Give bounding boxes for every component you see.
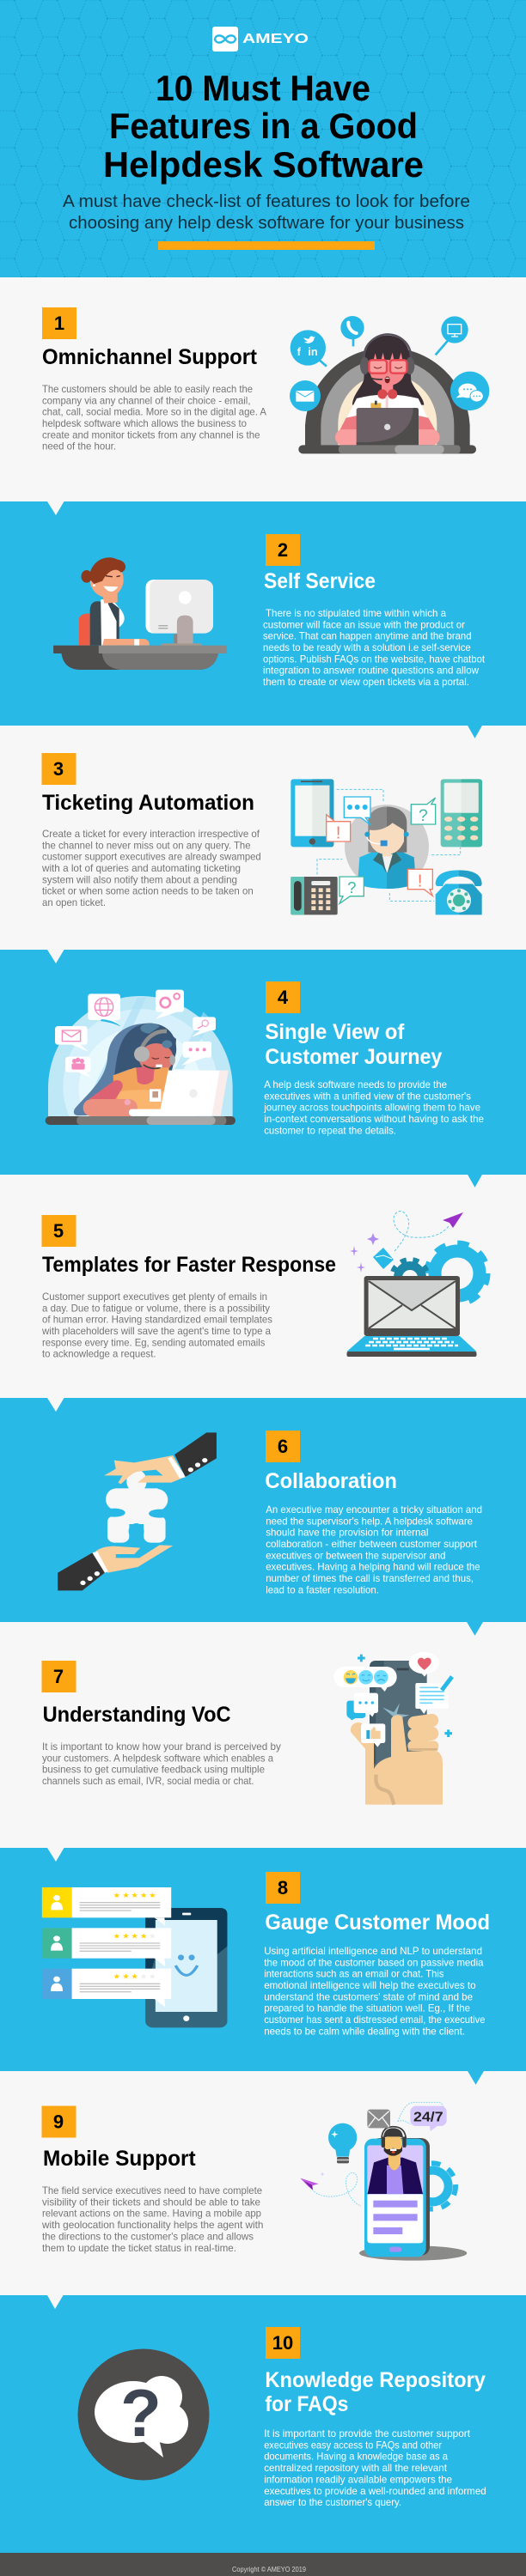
- body text: customer to repeat the details.: [264, 1124, 396, 1136]
- illustration: reviews on tablet: ★: [149, 1893, 156, 1900]
- heading: Knowledge Repository: [265, 2368, 486, 2392]
- subtitle: [63, 191, 470, 233]
- body text: centralized repository with all the relevant: [264, 2462, 448, 2474]
- number badge 5: [41, 1215, 76, 1247]
- logo: AMEYO: AMEYO: [242, 32, 309, 46]
- body text: chat, call, social media. More so in the digital age. A: [42, 406, 266, 418]
- arrow notch: [467, 1622, 483, 1636]
- illustration: hand holding phone: [333, 1652, 452, 1805]
- illustration: support agent with phones: [291, 779, 482, 914]
- arrow notch: [468, 2071, 484, 2085]
- illustration: support agent with phones: ?: [347, 878, 357, 896]
- number badge 9: [41, 2105, 76, 2138]
- body text: system will also notify them about a pending: [42, 873, 237, 885]
- number badge 2: [266, 534, 300, 566]
- illustration: reviews on tablet: ★: [122, 1973, 130, 1981]
- illustration: reviews on tablet: ★: [113, 1893, 120, 1900]
- body text: It is important to provide the customer support: [264, 2427, 471, 2439]
- notch: [47, 2295, 64, 2309]
- panel: 5 templates for faster response: [0, 1175, 526, 1398]
- number badge 7: [41, 1661, 76, 1692]
- body text: with a lot of queries and automating ticketing: [41, 862, 241, 874]
- illustration: agent on phone: [300, 2102, 467, 2261]
- illustration: support agent with phones: ?: [419, 807, 428, 825]
- heading: [265, 2368, 486, 2416]
- heading: Mobile Support: [43, 2147, 196, 2171]
- number badge 3: [41, 753, 76, 785]
- body text: A help desk software needs to provide the: [264, 1078, 447, 1091]
- illustration: woman at computer: [53, 557, 227, 670]
- number badge 9: 9: [53, 2111, 64, 2133]
- body text: executives with a unified view of the customer's: [264, 1090, 471, 1102]
- heading: Single View of: [265, 1020, 405, 1044]
- illustration: reviews on tablet: ★: [140, 1973, 148, 1981]
- illustration: reviews on tablet: ★: [122, 1933, 130, 1941]
- body text: them to create or view open tickets via a portal.: [263, 676, 469, 688]
- body text: Using artificial intelligence and NLP to understand: [264, 1945, 482, 1957]
- body text: Customer support executives get plenty of emails in: [42, 1291, 267, 1303]
- body text: service. That can happen anytime and the brand: [263, 630, 471, 642]
- body text: It is important to know how your brand is perceived by: [42, 1741, 281, 1753]
- illustration: reviews on tablet: ★: [140, 1933, 148, 1941]
- notch: [47, 1848, 64, 1862]
- body text: [264, 2427, 486, 2508]
- number badge 1: 1: [54, 313, 64, 334]
- heading: for FAQs: [265, 2392, 348, 2416]
- notch: [47, 501, 64, 515]
- body text: [264, 1945, 486, 2037]
- body text: There is no stipulated time within which a: [266, 607, 446, 619]
- heading: Collaboration: [265, 1469, 397, 1493]
- illustration: reviews on tablet: ★: [113, 1933, 120, 1941]
- body text: executives easy access to FAQs and other: [264, 2439, 442, 2451]
- panel: 4 single view of customer journey: [0, 950, 526, 1188]
- body text: the mood of the customer based on passive media: [264, 1956, 484, 1968]
- body text: understand the customers' state of mind and be: [264, 1990, 473, 2002]
- illustration: reviews on tablet: ★: [131, 1973, 138, 1981]
- panel: 6 collaboration: [0, 1398, 526, 1636]
- body text: executives. Having a helping hand will reduce the: [266, 1561, 480, 1573]
- number badge 6: 6: [278, 1436, 288, 1457]
- illustration: reviews on tablet: ★: [113, 1973, 120, 1981]
- body text: journey across touchpoints allowing them to have: [263, 1102, 480, 1114]
- illustration: agent with channels: in: [308, 346, 318, 358]
- arrow notch: [468, 726, 482, 738]
- body text: [263, 1078, 484, 1136]
- number badge 8: 8: [278, 1877, 288, 1899]
- body text: an open ticket.: [42, 896, 106, 908]
- panel: 1 omnichannel support: [0, 277, 526, 501]
- illustration: agent with channels: [290, 316, 489, 453]
- body text: ticket or when some action needs to be taken on: [42, 885, 254, 897]
- illustration: reviews on tablet: ★: [140, 1893, 148, 1900]
- illustration: hands with puzzle piece: [58, 1432, 217, 1590]
- body text: [41, 828, 261, 908]
- body text: a day. Due to fatigue or volume, there is a possibility: [42, 1302, 270, 1314]
- title: Helpdesk Software: [103, 144, 424, 185]
- panel: 7 understanding voc: [0, 1622, 526, 1848]
- number badge 3: 3: [53, 758, 64, 780]
- body text: with geolocation functionality helps the agent with: [41, 2219, 263, 2231]
- body text: An executive may encounter a tricky situation and: [266, 1504, 482, 1516]
- body text: need of the hour.: [42, 440, 116, 453]
- number badge 8: [266, 1872, 300, 1904]
- heading: Templates for Faster Response: [42, 1253, 336, 1277]
- footer: [0, 2553, 526, 2576]
- title: Features in a Good: [109, 106, 418, 146]
- number badge 1: [42, 307, 76, 339]
- illustration: agent with laptop: [45, 989, 235, 1125]
- logo: AMEYO: [212, 27, 309, 52]
- panel: 3 ticketing automation: [0, 726, 526, 950]
- body text: collaboration - either between customer support: [266, 1538, 478, 1550]
- number badge 6: [266, 1431, 300, 1462]
- body text: [41, 2184, 263, 2254]
- body text: needs to be calm while dealing with the client.: [264, 2025, 465, 2037]
- illustration: reviews on tablet: ★: [122, 1893, 130, 1900]
- number badge 7: 7: [53, 1666, 64, 1687]
- body text: The field service executives need to have complete: [42, 2184, 262, 2196]
- body text: Create a ticket for every interaction irrespective of: [42, 828, 260, 840]
- body text: [266, 1504, 482, 1595]
- title: [103, 68, 424, 185]
- body text: number of times the call is transferred and thus,: [266, 1572, 474, 1584]
- heading: [265, 1020, 442, 1069]
- body text: answer to the customer's query.: [264, 2496, 401, 2508]
- footer: Copyright © AMEYO 2019: [232, 2565, 306, 2573]
- panel: 2 self service: [0, 501, 526, 738]
- panel: 9 mobile support: [0, 2071, 526, 2295]
- body text: [42, 383, 266, 453]
- body text: need the supervisor's help. A helpdesk software: [266, 1515, 473, 1527]
- panel: header: [0, 0, 526, 277]
- body text: create and monitor tickets from any channel is the: [42, 428, 260, 440]
- title: 10 Must Have: [156, 68, 370, 108]
- panel: 8 gauge customer mood: [0, 1848, 526, 2085]
- body text: options. Publish FAQs on the website, have chatbot: [263, 653, 486, 665]
- icon: question speech bubble: ?: [120, 2375, 162, 2451]
- body text: the directions to the customer's place and allows: [42, 2230, 254, 2242]
- body text: integration to answer routine questions and allow: [263, 665, 479, 677]
- body text: of human error. Having standardized email templates: [42, 1314, 272, 1326]
- body text: in-context conversations without having to ask the: [264, 1113, 484, 1125]
- illustration: reviews on tablet: ★: [149, 1933, 156, 1941]
- body text: channels such as email, IVR, social media or chat.: [42, 1775, 254, 1787]
- panel: 10 knowledge repository: [0, 2295, 526, 2553]
- heading: Ticketing Automation: [42, 791, 254, 815]
- illustration: reviews on tablet: ★: [149, 1973, 156, 1981]
- body text: company via any channel of their choice - email,: [42, 394, 251, 406]
- illustration: agent on phone: 24/7: [413, 2111, 443, 2125]
- arrow notch: [468, 1175, 482, 1188]
- body text: customer has sent a distressed email, the executive: [264, 2014, 486, 2026]
- body text: helpdesk software which allows the business to: [42, 417, 247, 429]
- body text: emotional intelligence will help the executives to: [264, 1979, 476, 1991]
- icon: question speech bubble: [77, 2349, 210, 2480]
- body text: interactions such as an email or chat. This: [264, 1968, 443, 1980]
- illustration: email on laptop with gears: [347, 1212, 486, 1357]
- body text: the channel to never miss out on any query. The: [42, 839, 251, 851]
- body text: documents. Having a knowledge base as a: [264, 2451, 448, 2463]
- heading: Self Service: [264, 569, 376, 593]
- body text: [42, 1741, 281, 1787]
- subtitle: choosing any help desk software for your business: [69, 213, 464, 233]
- illustration: reviews on tablet: [42, 1887, 227, 2027]
- body text: lead to a faster resolution.: [266, 1583, 379, 1595]
- number badge 2: 2: [278, 539, 288, 561]
- body text: information readily available empowers the: [264, 2473, 452, 2485]
- heading: Omnichannel Support: [42, 345, 258, 369]
- illustration: support agent with phones: !: [418, 871, 423, 890]
- body text: with placeholders will save the agent's time to type a: [41, 1325, 271, 1337]
- notch: [47, 950, 64, 963]
- body text: executives or between the supervisor and: [266, 1549, 445, 1561]
- illustration: reviews on tablet: ★: [131, 1933, 138, 1941]
- body text: relevant actions on the same. Having a mobile app: [42, 2208, 261, 2220]
- accent bar: [158, 241, 375, 250]
- body text: to acknowledge a request.: [42, 1348, 156, 1360]
- body text: them to update the ticket status in real-time.: [42, 2242, 236, 2254]
- body text: [41, 1291, 272, 1360]
- body text: [263, 607, 486, 688]
- notch: [47, 1398, 64, 1412]
- heading: Understanding VoC: [43, 1703, 231, 1727]
- body text: prepared to handle the situation well. Eg., If the: [264, 2002, 470, 2014]
- illustration: reviews on tablet: ★: [131, 1893, 138, 1900]
- heading: Gauge Customer Mood: [265, 1911, 490, 1935]
- number badge 4: 4: [278, 987, 289, 1008]
- body text: visibility of their tickets and should be able to take: [42, 2196, 260, 2208]
- heading: Customer Journey: [265, 1045, 442, 1069]
- body text: customer support executives are already swamped: [42, 851, 261, 863]
- number badge 10: [266, 2327, 300, 2359]
- illustration: agent with channels: f: [297, 346, 302, 358]
- body text: business to get cumulative feedback using multiple: [42, 1764, 265, 1776]
- illustration: support agent with phones: !: [336, 823, 341, 843]
- body text: should have the provision for internal: [266, 1527, 428, 1539]
- body text: customer will face an issue with the product or: [263, 618, 465, 630]
- body text: needs to be ready with a solution i.e self-service: [263, 641, 471, 653]
- number badge 10: 10: [272, 2332, 293, 2354]
- number badge 4: [266, 981, 300, 1013]
- body text: response every time. Eg, sending automated emails: [42, 1336, 265, 1348]
- body text: executives to provide a well-rounded and informed: [264, 2485, 486, 2497]
- number badge 5: 5: [53, 1220, 64, 1242]
- body text: The customers should be able to easily reach the: [42, 383, 253, 395]
- body text: your customers. A helpdesk software which enables a: [42, 1752, 273, 1764]
- subtitle: A must have check-list of features to look for before: [63, 191, 470, 211]
